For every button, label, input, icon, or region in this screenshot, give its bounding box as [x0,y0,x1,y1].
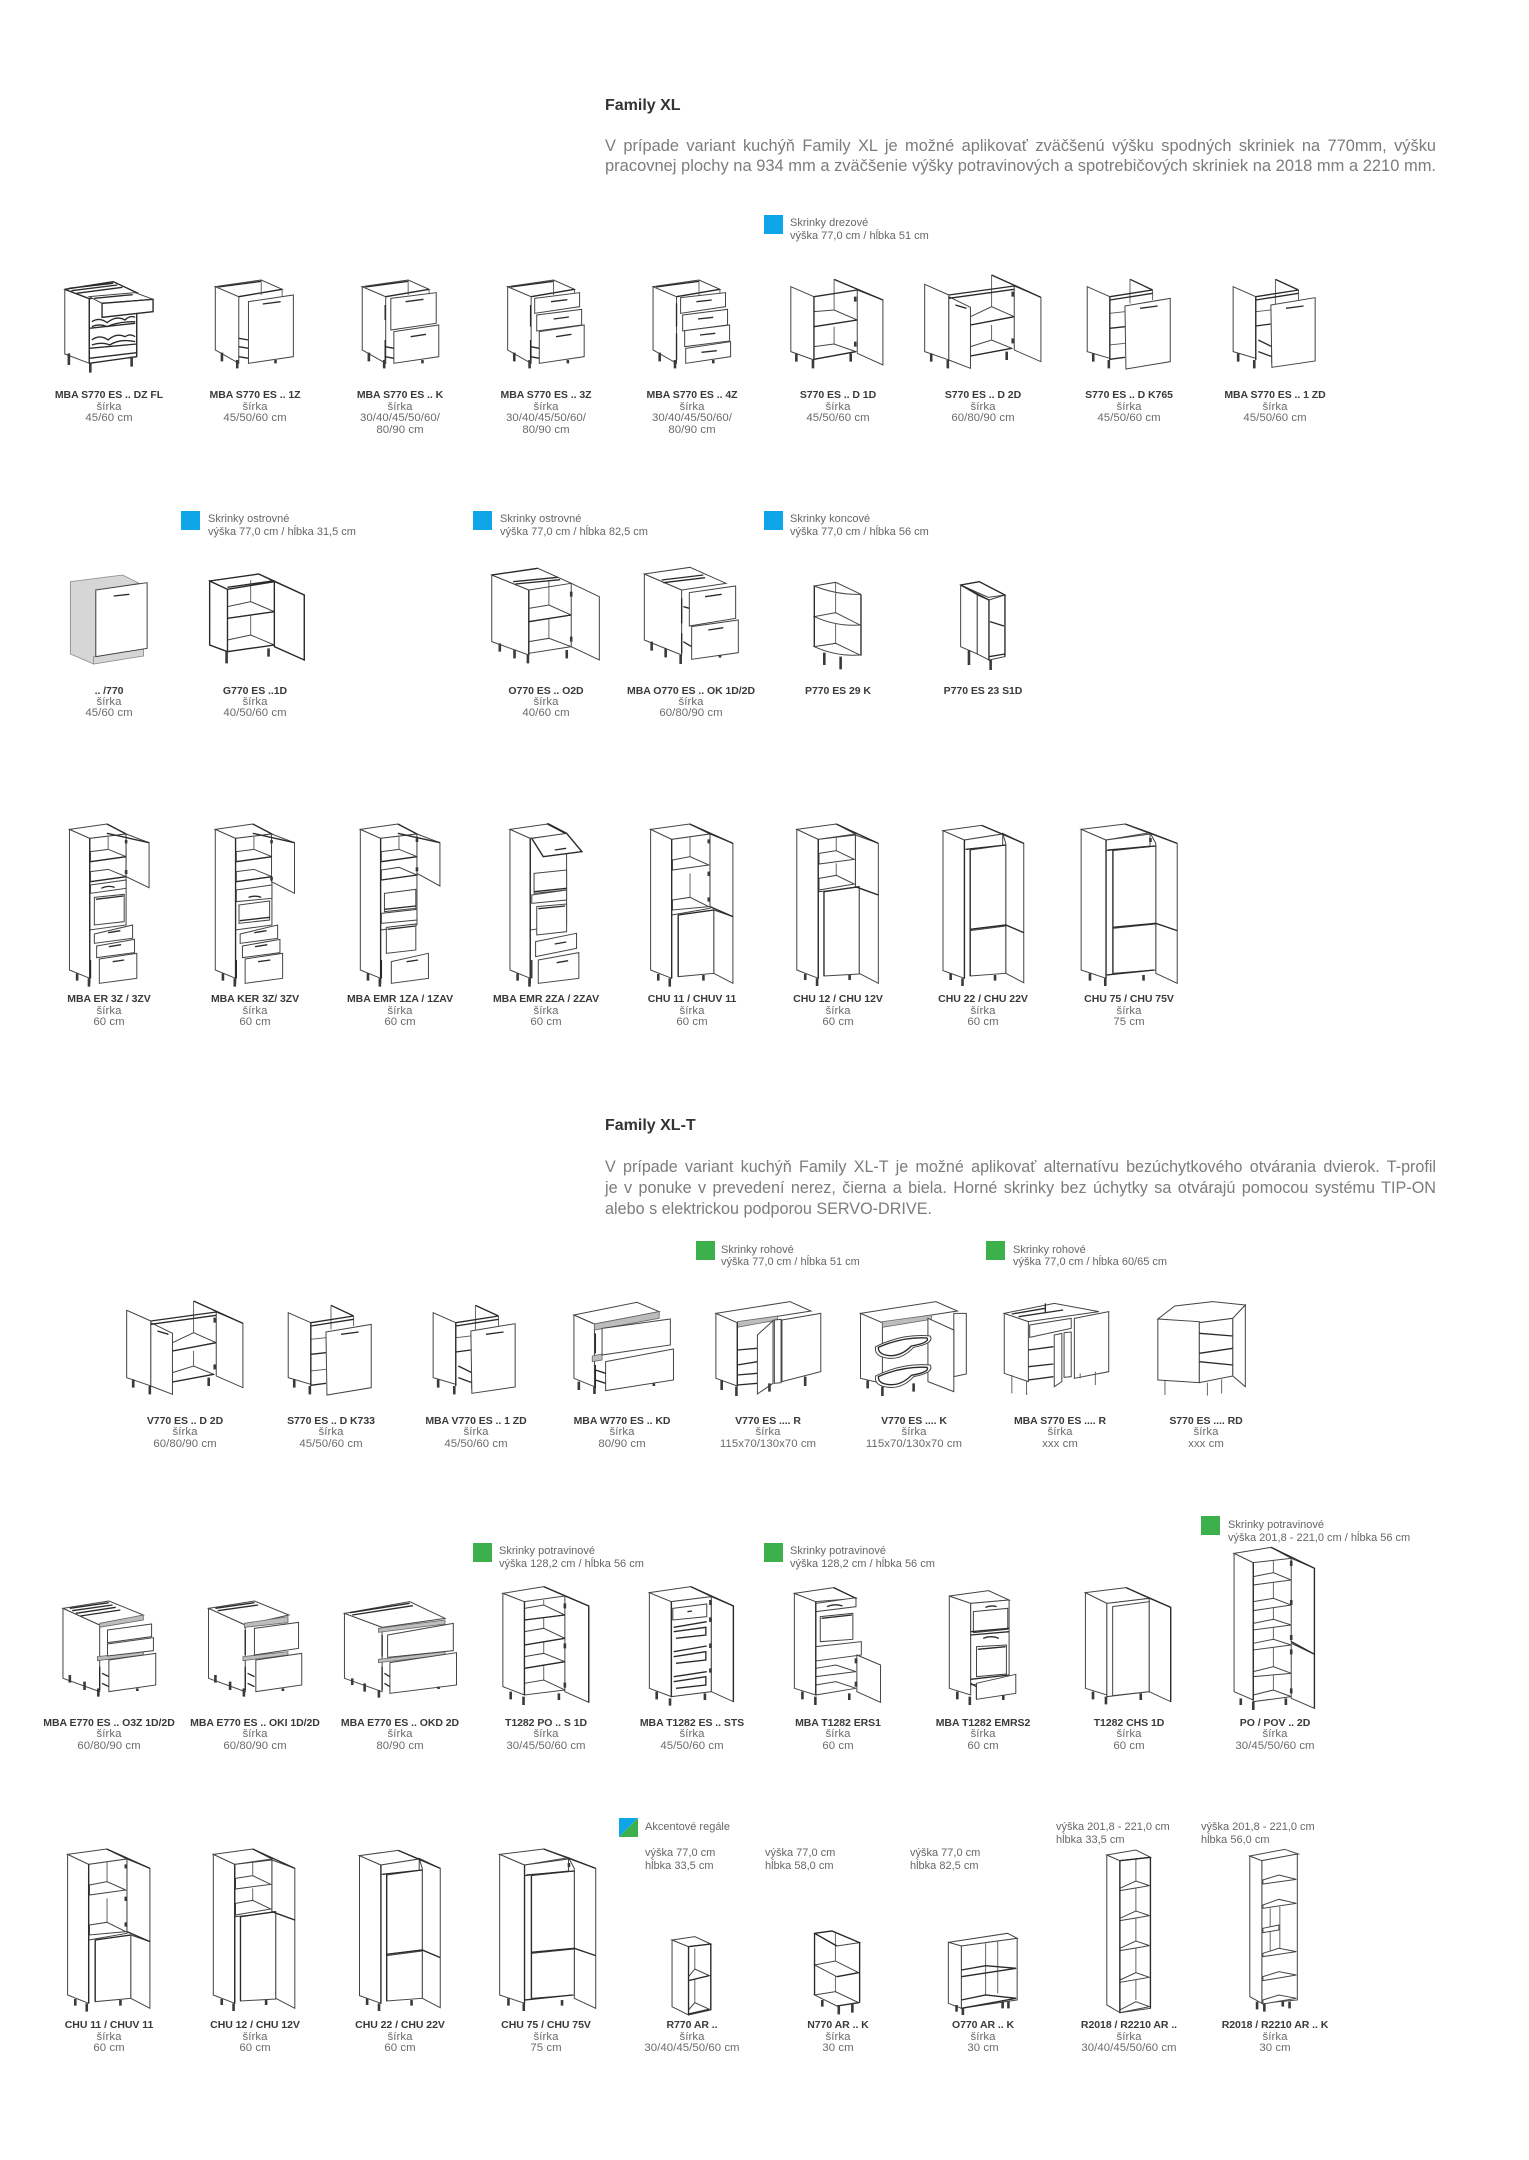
note: výška 201,8-221,0 / hĺbka 56,0: výška 201,8 - 221,0 cm [1201,1821,1315,1833]
cabinet: MBA S770 ES .... R: šírka [1048,1426,1073,1438]
cabinet: R2018 / R2210 AR .. K [1222,1849,1329,2054]
legend: Skrinky rohové 60/65: Skrinky rohové [1013,1244,1086,1256]
heading: Family XL: Family XL [605,97,681,114]
cabinet: MBA S770 ES .. K: 30/40/45/50/60/ [360,412,441,424]
cabinet: CHU 22 / CHU 22V [938,825,1028,1028]
legend: Skrinky potravinové 128,2 (1): Skrinky potravinové [499,1545,595,1557]
cabinet: T1282 PO .. S 1D: 30/45/50/60 cm [506,1740,586,1752]
legend: Skrinky potravinové 128,2 (1) [473,1543,644,1570]
cabinet: MBA S770 ES .. DZ FL: MBA S770 ES .. DZ FL [55,389,164,401]
cabinet: MBA O770 ES .. OK 1D/2D: 60/80/90 cm [659,707,723,719]
cabinet: CHU 22 / CHU 22V (T) [355,1850,445,2054]
note: výška 77,0 / hĺbka 82,5 [910,1847,980,1872]
note: výška 201,8-221,0 / hĺbka 56,0 [1201,1821,1315,1846]
cabinet: CHU 22 / CHU 22V (T): CHU 22 / CHU 22V [355,2019,445,2031]
cabinet: CHU 75 / CHU 75V: šírka [1117,1005,1142,1017]
cabinet: MBA E770 ES .. OKD 2D: šírka [388,1728,413,1740]
cabinet: MBA T1282 EMRS2: šírka [971,1728,996,1740]
legend: Skrinky potravinové 201,8 [1201,1516,1410,1544]
text block: Family XL-T description: je v ponuke v prevedení nerez, čierna a biela. Horné skrinky bez úchytky sa otvárajú pomocou systému TIP-ON [604,1178,1436,1197]
cabinet: CHU 22 / CHU 22V (T): šírka [388,2031,413,2043]
cabinet: MBA EMR 2ZA / 2ZAV [493,823,599,1028]
text block: Family XL-T description: alebo s elektrickou podporou SERVO-DRIVE. [605,1199,932,1218]
cabinet: MBA E770 ES .. OKI 1D/2D: 60/80/90 cm [223,1740,287,1752]
text block: Family XL description [605,136,1436,175]
cabinet: CHU 11 / CHUV 11: šírka [680,1005,705,1017]
cabinet: R2018 / R2210 AR ..: šírka [1117,2031,1142,2043]
cabinet: MBA EMR 1ZA / 1ZAV: šírka [388,1005,413,1017]
cabinet: S770 ES .. D K733: S770 ES .. D K733 [287,1415,375,1427]
cabinet: S770 ES .. D K765: 45/50/60 cm [1097,412,1161,424]
legend: Skrinky ostrovné 82,5 [473,511,648,538]
cabinet: CHU 11 / CHUV 11 (T): CHU 11 / CHUV 11 [65,2019,153,2031]
cabinet: .. /770: šírka [97,696,122,708]
cabinet: CHU 12 / CHU 12V (T): šírka [243,2031,268,2043]
cabinet: T1282 CHS 1D: 60 cm [1113,1740,1145,1752]
cabinet: MBA S770 ES .... R: xxx cm [1042,1438,1078,1450]
cabinet: MBA EMR 2ZA / 2ZAV: MBA EMR 2ZA / 2ZAV [493,993,599,1005]
cabinet: T1282 CHS 1D: T1282 CHS 1D [1094,1717,1165,1729]
cabinet: O770 ES .. O2D: 40/60 cm [522,707,570,719]
legend: Skrinky rohové 60/65: výška 77,0 cm / hĺbka 60/65 cm [1013,1255,1167,1268]
cabinet: MBA S770 ES .. 1 ZD: MBA S770 ES .. 1 ZD [1224,389,1326,401]
cabinet: T1282 CHS 1D [1085,1588,1171,1752]
cabinet: MBA W770 ES .. KD: 80/90 cm [598,1438,646,1450]
cabinet: MBA E770 ES .. OKD 2D: 80/90 cm [376,1740,424,1752]
cabinet: S770 ES .. D K733: šírka [319,1426,344,1438]
cabinet: MBA W770 ES .. KD: MBA W770 ES .. KD [574,1415,671,1427]
cabinet: MBA S770 ES .. 4Z [647,280,738,436]
cabinet: MBA V770 ES .. 1 ZD: MBA V770 ES .. 1 ZD [425,1415,527,1427]
cabinet: O770 ES .. O2D: šírka [534,696,559,708]
cabinet: MBA ER 3Z / 3ZV: MBA ER 3Z / 3ZV [67,993,151,1005]
cabinet: MBA KER 3Z/ 3ZV: 60 cm [239,1016,271,1028]
legend: Skrinky rohové 51: výška 77,0 cm / hĺbka 51 cm [721,1255,860,1268]
cabinet: MBA T1282 ERS1: MBA T1282 ERS1 [795,1717,881,1729]
cabinet: CHU 75 / CHU 75V: CHU 75 / CHU 75V [1084,993,1174,1005]
cabinet: MBA S770 ES .. K: šírka [388,401,413,413]
cabinet: CHU 75 / CHU 75V (T): šírka [534,2031,559,2043]
cabinet: S770 ES .. D 1D: S770 ES .. D 1D [800,389,877,401]
legend: Skrinky potravinové 201,8: Skrinky potravinové [1228,1519,1324,1531]
cabinet: PO / POV .. 2D: PO / POV .. 2D [1240,1717,1311,1729]
cabinet: MBA E770 ES .. OKD 2D [341,1602,460,1752]
note: výška 201,8-221,0 / hĺbka 33,5: hĺbka 33,5 cm [1056,1833,1124,1846]
cabinet: MBA EMR 2ZA / 2ZAV: 60 cm [530,1016,562,1028]
cabinet: MBA S770 ES .. 1 ZD: šírka [1263,401,1288,413]
cabinet: MBA S770 ES .. DZ FL: 45/60 cm [85,412,133,424]
note: výška 201,8-221,0 / hĺbka 56,0: hĺbka 56,0 cm [1201,1833,1269,1846]
heading: Family XL-T: Family XL-T [605,1117,696,1134]
cabinet: MBA S770 ES .. 3Z: 30/40/45/50/60/ [506,412,587,424]
legend: Akcentové regále: Akcentové regále [645,1821,730,1833]
cabinet: S770 ES .... RD: xxx cm [1188,1438,1224,1450]
cabinet: R2018 / R2210 AR .. K: R2018 / R2210 AR .. K [1222,2019,1329,2031]
cabinet: R2018 / R2210 AR .. [1081,1850,1177,2054]
cabinet: V770 ES .... K: šírka [902,1426,927,1438]
cabinet: MBA E770 ES .. OKI 1D/2D: šírka [243,1728,268,1740]
cabinet: O770 AR .. K [948,1933,1017,2054]
cabinet: S770 ES .... RD: šírka [1194,1426,1219,1438]
cabinet: P770 ES 23 S1D [944,582,1023,697]
cabinet: MBA S770 ES .. 4Z: 30/40/45/50/60/ [652,412,733,424]
text block: Family XL description: V prípade variant kuchýň Family XL je možné aplikovať zväčšenú výšku spodných skriniek na 770mm, výšku [605,136,1436,155]
cabinet: CHU 11 / CHUV 11 (T) [65,1849,153,2054]
cabinet: CHU 75 / CHU 75V [1081,824,1177,1028]
cabinet: CHU 12 / CHU 12V (T): 60 cm [239,2042,271,2054]
cabinet: MBA T1282 EMRS2: MBA T1282 EMRS2 [936,1717,1030,1729]
cabinet: MBA T1282 ERS1: šírka [826,1728,851,1740]
legend: Skrinky ostrovné 31,5 [181,511,356,538]
cabinet: MBA O770 ES .. OK 1D/2D: šírka [679,696,704,708]
cabinet: MBA S770 ES .. 4Z: 80/90 cm [668,424,716,436]
cabinet: MBA S770 ES .. 4Z: šírka [680,401,705,413]
cabinet: MBA W770 ES .. KD [574,1302,673,1450]
legend: Skrinky koncové [764,511,929,538]
note: výška 201,8-221,0 / hĺbka 33,5 [1056,1821,1170,1846]
cabinet: N770 AR .. K: 30 cm [822,2042,854,2054]
cabinet: V770 ES .... K: 115x70/130x70 cm [866,1438,962,1450]
cabinet: MBA T1282 ES .. STS: 45/50/60 cm [660,1740,724,1752]
cabinet: MBA T1282 ERS1 [794,1588,881,1752]
cabinet: CHU 22 / CHU 22V: 60 cm [967,1016,999,1028]
cabinet: MBA E770 ES .. O3Z 1D/2D: MBA E770 ES .. O3Z 1D/2D [43,1717,175,1729]
cabinet: MBA S770 ES .... R [1004,1303,1109,1450]
cabinet: CHU 12 / CHU 12V: 60 cm [822,1016,854,1028]
cabinet: S770 ES .. D K733: 45/50/60 cm [299,1438,363,1450]
legend: Skrinky drezové [764,215,929,242]
cabinet: MBA E770 ES .. O3Z 1D/2D: 60/80/90 cm [77,1740,141,1752]
cabinet: V770 ES .... K: V770 ES .... K [881,1415,947,1427]
cabinet: MBA O770 ES .. OK 1D/2D [627,567,755,719]
cabinet: MBA ER 3Z / 3ZV [67,824,151,1028]
cabinet: V770 ES .. D 2D [127,1301,243,1450]
legend: Skrinky ostrovné 82,5: výška 77,0 cm / hĺbka 82,5 cm [500,525,648,538]
cabinet: CHU 12 / CHU 12V (T) [210,1849,300,2054]
cabinet: MBA EMR 1ZA / 1ZAV: MBA EMR 1ZA / 1ZAV [347,993,453,1005]
cabinet: CHU 12 / CHU 12V: CHU 12 / CHU 12V [793,993,883,1005]
note: výška 77,0 / hĺbka 33,5 [645,1847,715,1872]
cabinet: T1282 PO .. S 1D: T1282 PO .. S 1D [505,1717,588,1729]
cabinet: MBA S770 ES .. 1 ZD: 45/50/60 cm [1243,412,1307,424]
cabinet: CHU 22 / CHU 22V: šírka [971,1005,996,1017]
cabinet: P770 ES 29 K: P770 ES 29 K [805,685,871,697]
section: Family XL [55,97,1436,1028]
cabinet: MBA V770 ES .. 1 ZD: šírka [464,1426,489,1438]
cabinet: V770 ES .... R: V770 ES .... R [735,1415,801,1427]
cabinet: MBA S770 ES .. K: MBA S770 ES .. K [357,389,444,401]
cabinet: MBA E770 ES .. OKI 1D/2D [190,1601,320,1752]
cabinet: CHU 75 / CHU 75V: 75 cm [1113,1016,1145,1028]
cabinet: CHU 11 / CHUV 11: 60 cm [676,1016,708,1028]
cabinet: MBA S770 ES .. 1Z: 45/50/60 cm [223,412,287,424]
cabinet: MBA E770 ES .. OKI 1D/2D: MBA E770 ES .. OKI 1D/2D [190,1717,320,1729]
cabinet: PO / POV .. 2D [1234,1547,1315,1752]
cabinet: V770 ES .... R [716,1302,821,1450]
note: výška 77,0 / hĺbka 58,0 [765,1847,835,1872]
note: výška 77,0 / hĺbka 58,0: výška 77,0 cm [765,1847,835,1859]
cabinet: PO / POV .. 2D: šírka [1263,1728,1288,1740]
cabinet: MBA W770 ES .. KD: šírka [610,1426,635,1438]
cabinet: CHU 22 / CHU 22V: CHU 22 / CHU 22V [938,993,1028,1005]
cabinet: S770 ES .. D 2D: S770 ES .. D 2D [945,389,1022,401]
section: Family XL-T [43,1117,1436,2054]
cabinet: G770 ES ..1D: G770 ES ..1D [223,685,288,697]
cabinet: G770 ES ..1D [210,574,304,719]
legend: Skrinky drezové: Skrinky drezové [790,217,868,229]
cabinet: S770 ES .... RD [1158,1302,1245,1450]
cabinet: S770 ES .. D K765: šírka [1117,401,1142,413]
cabinet: MBA S770 ES .. 3Z: 80/90 cm [522,424,570,436]
note: výška 201,8-221,0 / hĺbka 33,5: výška 201,8 - 221,0 cm [1056,1821,1170,1833]
cabinet: S770 ES .. D 2D: šírka [971,401,996,413]
legend: Skrinky potravinové 128,2 (2): Skrinky potravinové [790,1545,886,1557]
cabinet: N770 AR .. K: šírka [826,2031,851,2043]
cabinet: T1282 PO .. S 1D [503,1587,589,1752]
cabinet: MBA V770 ES .. 1 ZD [425,1305,527,1450]
cabinet: N770 AR .. K [807,1931,869,2054]
cabinet: MBA T1282 ES .. STS: šírka [680,1728,705,1740]
cabinet: MBA V770 ES .. 1 ZD: 45/50/60 cm [444,1438,508,1450]
cabinet: R2018 / R2210 AR ..: 30/40/45/50/60 cm [1081,2042,1177,2054]
cabinet: MBA S770 ES .. 4Z: MBA S770 ES .. 4Z [647,389,738,401]
cabinet: S770 ES .... RD: S770 ES .... RD [1169,1415,1243,1427]
legend: Skrinky rohové 60/65 [986,1241,1167,1268]
cabinet: MBA S770 ES .. K [357,280,444,436]
legend: Skrinky ostrovné 82,5: Skrinky ostrovné [500,513,581,525]
cabinet: MBA KER 3Z/ 3ZV: MBA KER 3Z/ 3ZV [211,993,299,1005]
cabinet: MBA S770 ES .. 3Z: MBA S770 ES .. 3Z [501,389,592,401]
cabinet: CHU 22 / CHU 22V (T): 60 cm [384,2042,416,2054]
cabinet: MBA S770 ES .... R: MBA S770 ES .... R [1014,1415,1107,1427]
cabinet: S770 ES .. D 1D: 45/50/60 cm [806,412,870,424]
cabinet: MBA S770 ES .. K: 80/90 cm [376,424,424,436]
cabinet: MBA S770 ES .. DZ FL [55,282,164,424]
cabinet: MBA KER 3Z/ 3ZV [211,824,299,1028]
cabinet: MBA S770 ES .. DZ FL: šírka [97,401,122,413]
cabinet: R770 AR ..: šírka [680,2031,705,2043]
cabinet: R2018 / R2210 AR .. K: 30 cm [1259,2042,1291,2054]
cabinet: V770 ES .... R: 115x70/130x70 cm [720,1438,816,1450]
cabinet: MBA T1282 ERS1: 60 cm [822,1740,854,1752]
cabinet: MBA KER 3Z/ 3ZV: šírka [243,1005,268,1017]
cabinet: MBA S770 ES .. 1Z: šírka [243,401,268,413]
cabinet: CHU 12 / CHU 12V: šírka [826,1005,851,1017]
legend: Skrinky potravinové 128,2 (2): výška 128,2 cm / hĺbka 56 cm [790,1557,935,1570]
cabinet: S770 ES .. D 1D [791,279,883,424]
cabinet: .. /770: .. /770 [95,685,124,697]
cabinet: O770 AR .. K: O770 AR .. K [952,2019,1014,2031]
cabinet: CHU 11 / CHUV 11: CHU 11 / CHUV 11 [648,993,736,1005]
note: výška 77,0 / hĺbka 82,5: výška 77,0 cm [910,1847,980,1859]
cabinet: V770 ES .. D 2D: 60/80/90 cm [153,1438,217,1450]
cabinet: T1282 PO .. S 1D: šírka [534,1728,559,1740]
legend: Skrinky rohové 51 [696,1241,860,1268]
text block: Family XL-T description [604,1157,1436,1218]
cabinet: S770 ES .. D 2D: 60/80/90 cm [951,412,1015,424]
note: výška 77,0 / hĺbka 33,5: výška 77,0 cm [645,1847,715,1859]
cabinet: MBA T1282 EMRS2: 60 cm [967,1740,999,1752]
legend: Skrinky potravinové 128,2 (2) [764,1543,935,1570]
cabinet: MBA S770 ES .. 1Z [210,280,301,424]
cabinet: MBA ER 3Z / 3ZV: 60 cm [93,1016,125,1028]
cabinet: CHU 11 / CHUV 11 (T): šírka [97,2031,122,2043]
cabinet: MBA T1282 ES .. STS [640,1587,744,1752]
cabinet: G770 ES ..1D: 40/50/60 cm [223,707,287,719]
cabinet: R2018 / R2210 AR ..: R2018 / R2210 AR .. [1081,2019,1177,2031]
cabinet: .. /770 [70,575,147,719]
cabinet: MBA O770 ES .. OK 1D/2D: MBA O770 ES .. OK 1D/2D [627,685,755,697]
cabinet: MBA EMR 1ZA / 1ZAV [347,824,453,1028]
cabinet: CHU 12 / CHU 12V (T): CHU 12 / CHU 12V [210,2019,300,2031]
cabinet: S770 ES .. D K733 [287,1305,375,1450]
cabinet: R2018 / R2210 AR .. K: šírka [1263,2031,1288,2043]
cabinet: MBA S770 ES .. 1 ZD [1224,279,1326,424]
cabinet: CHU 75 / CHU 75V (T): 75 cm [530,2042,562,2054]
cabinet: R770 AR ..: R770 AR .. [666,2019,718,2031]
cabinet: MBA T1282 EMRS2 [936,1591,1030,1752]
cabinet: S770 ES .. D 1D: šírka [826,401,851,413]
note: výška 77,0 / hĺbka 58,0: hĺbka 58,0 cm [765,1859,833,1872]
cabinet: N770 AR .. K: N770 AR .. K [807,2019,869,2031]
cabinet: O770 ES .. O2D: O770 ES .. O2D [508,685,584,697]
cabinet: P770 ES 29 K [805,582,871,697]
cabinet: .. /770: 45/60 cm [85,707,133,719]
cabinet: S770 ES .. D 2D [925,275,1041,424]
legend: Skrinky koncové: výška 77,0 cm / hĺbka 56 cm [790,525,929,538]
cabinet: V770 ES .... K [861,1302,966,1450]
cabinet: CHU 11 / CHUV 11 (T): 60 cm [93,2042,125,2054]
legend: Skrinky potravinové 128,2 (1): výška 128,2 cm / hĺbka 56 cm [499,1557,644,1570]
note: výška 77,0 / hĺbka 33,5: hĺbka 33,5 cm [645,1859,713,1872]
legend: Skrinky ostrovné 31,5: Skrinky ostrovné [208,513,289,525]
cabinet: PO / POV .. 2D: 30/45/50/60 cm [1235,1740,1315,1752]
cabinet: S770 ES .. D K765: S770 ES .. D K765 [1085,389,1173,401]
cabinet: R770 AR ..: 30/40/45/50/60 cm [644,2042,740,2054]
cabinet: CHU 75 / CHU 75V (T) [500,1849,596,2054]
cabinet: T1282 CHS 1D: šírka [1117,1728,1142,1740]
cabinet: CHU 11 / CHUV 11 [648,824,736,1028]
legend: Akcentové regále [619,1818,730,1837]
legend: Skrinky koncové: Skrinky koncové [790,513,870,525]
legend: Skrinky rohové 51: Skrinky rohové [721,1244,794,1256]
cabinet: MBA T1282 ES .. STS: MBA T1282 ES .. STS [640,1717,744,1729]
text block: Family XL description: pracovnej plochy na 934 mm a zväčšenie výšky potravinových a spotrebičových skriniek na 2018 mm a 2210 mm. [605,156,1436,175]
cabinet: P770 ES 23 S1D: P770 ES 23 S1D [944,685,1023,697]
cabinet: G770 ES ..1D: šírka [243,696,268,708]
cabinet: CHU 75 / CHU 75V (T): CHU 75 / CHU 75V [501,2019,591,2031]
cabinet: MBA EMR 2ZA / 2ZAV: šírka [534,1005,559,1017]
legend: Skrinky drezové: výška 77,0 cm / hĺbka 51 cm [790,229,929,242]
legend: Skrinky potravinové 201,8: výška 201,8 - 221,0 cm / hĺbka 56 cm [1228,1531,1410,1544]
cabinet: V770 ES .. D 2D: V770 ES .. D 2D [147,1415,224,1427]
cabinet: MBA EMR 1ZA / 1ZAV: 60 cm [384,1016,416,1028]
cabinet: V770 ES .... R: šírka [756,1426,781,1438]
cabinet: MBA E770 ES .. O3Z 1D/2D: šírka [97,1728,122,1740]
cabinet: O770 AR .. K: 30 cm [967,2042,999,2054]
text block: Family XL-T description: V prípade variant kuchýň Family XL-T je možné aplikovať alternatívu bezúchytkového otvárania dvierok. T-profil [605,1157,1436,1176]
cabinet: MBA S770 ES .. 1Z: MBA S770 ES .. 1Z [210,389,301,401]
cabinet: O770 ES .. O2D [492,568,599,719]
cabinet: R770 AR .. [644,1937,740,2054]
cabinet: O770 AR .. K: šírka [971,2031,996,2043]
cabinet: S770 ES .. D K765 [1085,279,1173,424]
legend: Skrinky ostrovné 31,5: výška 77,0 cm / hĺbka 31,5 cm [208,525,356,538]
cabinet: MBA ER 3Z / 3ZV: šírka [97,1005,122,1017]
cabinet: MBA S770 ES .. 3Z: šírka [534,401,559,413]
cabinet: MBA E770 ES .. O3Z 1D/2D [43,1601,175,1752]
cabinet: CHU 12 / CHU 12V [793,824,883,1028]
note: výška 77,0 / hĺbka 82,5: hĺbka 82,5 cm [910,1859,978,1872]
cabinet: MBA E770 ES .. OKD 2D: MBA E770 ES .. OKD 2D [341,1717,460,1729]
cabinet: MBA S770 ES .. 3Z [501,280,592,436]
cabinet: V770 ES .. D 2D: šírka [173,1426,198,1438]
